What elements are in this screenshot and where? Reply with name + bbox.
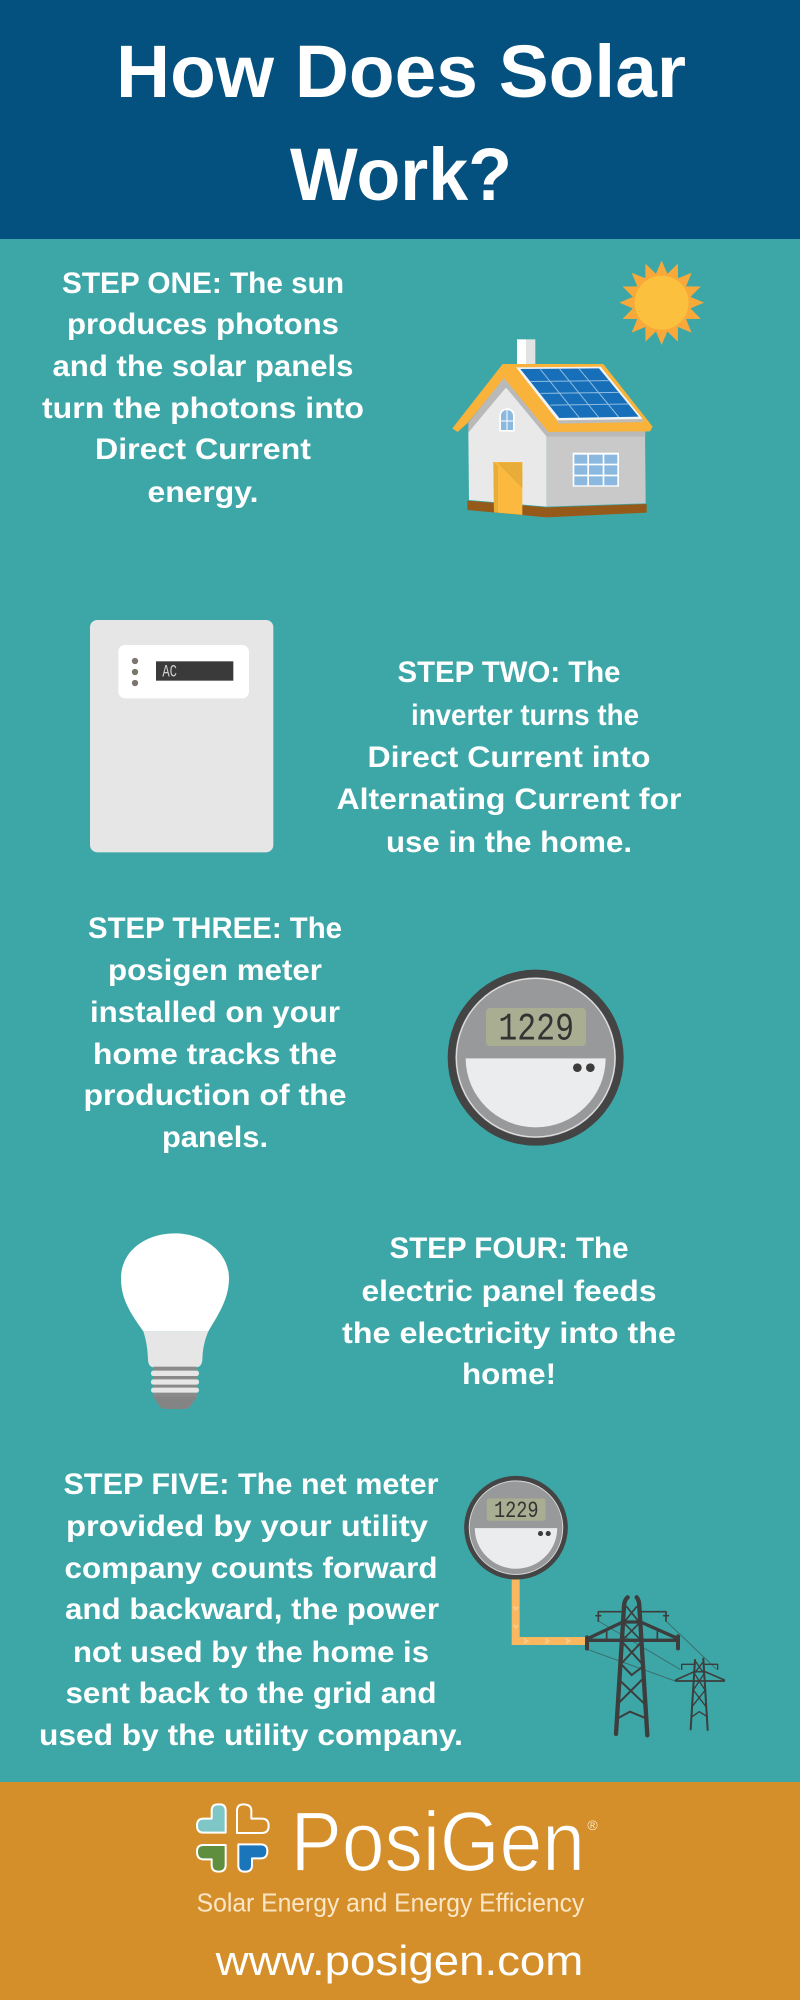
- text block: step three: installed on your: [90, 996, 340, 1029]
- text block: step two: Direct Current into: [368, 741, 650, 774]
- website address: www.posigen.com: [215, 1938, 583, 1984]
- icon: power lines: [587, 1621, 717, 1681]
- header banner with title: How Does Solar: [116, 30, 686, 113]
- text block: step three: [84, 912, 346, 1154]
- icon: posigen meter: [448, 970, 624, 1146]
- icon: large pylon: [587, 1597, 678, 1735]
- text block: step five: company counts forward: [64, 1552, 438, 1585]
- icon: net meter: [464, 1476, 568, 1580]
- text block: step one: [42, 267, 364, 509]
- text block: step four: home!: [462, 1358, 556, 1391]
- text block: step one: Direct Current: [95, 433, 311, 466]
- icon: PosiGen cross logo: [197, 1804, 269, 1872]
- text block: step five: not used by the home is: [73, 1636, 429, 1669]
- icon: small pylon: [676, 1659, 724, 1730]
- text block: step one: produces photons: [67, 308, 339, 341]
- text block: step three: production of the: [84, 1079, 346, 1112]
- icon: inverter: [90, 620, 273, 852]
- text block: step five: sent back to the grid and: [66, 1677, 436, 1710]
- text block: step five: STEP FIVE: The net meter: [64, 1468, 439, 1501]
- logo wordmark: PosiGen: [291, 1795, 585, 1889]
- text block: step two: STEP TWO: The: [398, 656, 620, 689]
- text block: step one: turn the photons into: [42, 392, 364, 425]
- text block: step four: [342, 1232, 676, 1391]
- text block: step five: provided by your utility: [66, 1510, 428, 1543]
- text block: step two: [336, 656, 682, 859]
- text block: step four: STEP FOUR: The: [390, 1232, 628, 1265]
- icon: orange wire: [513, 1579, 585, 1643]
- text block: step two: inverter turns the: [411, 699, 639, 732]
- icon: inverter: AC: [162, 664, 177, 683]
- header banner with title: Work?: [290, 133, 512, 216]
- registered mark: ®: [587, 1817, 598, 1833]
- icon: house with solar panels and sun: [452, 260, 704, 517]
- footer band with PosiGen logo: [0, 1782, 800, 2000]
- text block: step three: home tracks the: [93, 1038, 337, 1071]
- text block: step three: STEP THREE: The: [88, 912, 342, 945]
- icon: net meter connected to power grid: [464, 1476, 724, 1735]
- text block: step one: STEP ONE: The sun: [62, 267, 344, 300]
- text block: step three: panels.: [162, 1121, 268, 1154]
- text block: step four: electric panel feeds: [362, 1275, 656, 1308]
- text block: step one: energy.: [148, 476, 258, 509]
- icon: posigen meter: 1229: [498, 1006, 574, 1051]
- text block: step five: [39, 1468, 463, 1752]
- text block: step five: used by the utility company.: [39, 1719, 463, 1752]
- icon: light bulb: [121, 1233, 229, 1409]
- text block: step five: and backward, the power: [65, 1593, 439, 1626]
- text block: step two: Alternating Current for: [336, 783, 682, 816]
- text block: step three: posigen meter: [108, 954, 322, 987]
- text block: step two: use in the home.: [386, 826, 632, 859]
- logo tagline: Solar Energy and Energy Efficiency: [197, 1888, 584, 1918]
- text block: step four: the electricity into the: [342, 1317, 676, 1350]
- header banner with title: [0, 0, 800, 239]
- text block: step one: and the solar panels: [52, 350, 354, 383]
- icon: net meter: 1229: [494, 1498, 539, 1524]
- icon: sun: [619, 260, 704, 345]
